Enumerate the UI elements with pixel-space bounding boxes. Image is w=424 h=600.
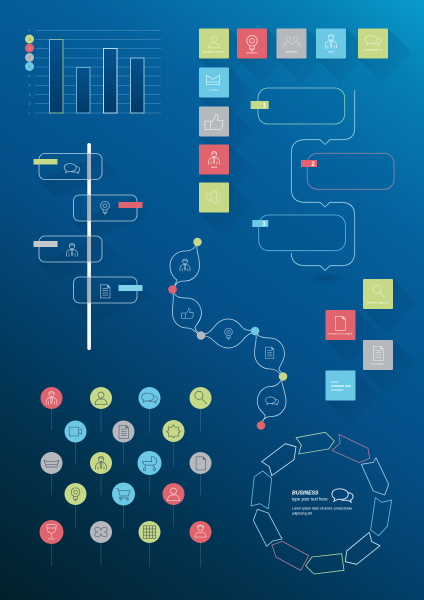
tile: text document (363, 340, 393, 370)
arrow: top right red (332, 434, 370, 463)
timeline item 1 (34, 154, 102, 180)
arrow: top green (296, 432, 334, 454)
pin: basket (40, 452, 62, 474)
wheel centre chat icon (332, 489, 353, 502)
pin: blank document (190, 452, 212, 474)
icon tile: chat: COMMUNICATION (364, 48, 383, 52)
pin: pram (138, 451, 162, 475)
timeline axis (87, 143, 91, 350)
wheel centre text: type your text here (292, 496, 328, 502)
pin: cart (112, 482, 135, 506)
wheel centre text: BUSINESS (292, 490, 319, 496)
pin: bulb (64, 483, 86, 505)
timeline item 2 (74, 195, 142, 221)
tile: search (363, 279, 393, 309)
axis labels: 3 (28, 92, 31, 97)
axis labels: 5 (28, 74, 31, 78)
legend dots: 8 (28, 46, 31, 50)
icon tile: team: PARTNERS (286, 50, 298, 54)
icon tile: user: BUSINESS CONCEPT (203, 52, 226, 54)
axis labels: 2 (28, 101, 31, 106)
snake curves (170, 245, 286, 422)
axis labels: 4 (28, 82, 31, 88)
legend dots (25, 34, 34, 71)
tile: text block (326, 370, 356, 400)
wheel centre text (292, 490, 353, 516)
pins row 4 (64, 482, 184, 529)
pins row 2 (64, 420, 184, 466)
pin: chat (138, 387, 160, 409)
timeline (34, 143, 142, 350)
arrow: lower right white (345, 532, 380, 564)
icon tile: speaker person: NAME (211, 166, 218, 169)
arrow: left blue (251, 471, 272, 509)
bar chart (25, 28, 161, 116)
pins row 1 (40, 387, 212, 433)
pins row 3 (40, 451, 212, 495)
legend dots: 9 (28, 36, 31, 42)
pins row 5 (40, 520, 212, 567)
icon tile: idea: BUSINESS (246, 52, 258, 54)
wheel centre text: adipiscing elit (292, 512, 312, 516)
snake path diagram (168, 238, 287, 430)
arrow: lower left pale (253, 509, 282, 546)
tag 1: 1 (263, 104, 267, 110)
snake dots (168, 238, 287, 430)
tag 3: 3 (262, 222, 266, 228)
chart grid lines (35, 30, 161, 113)
timeline axis overlaps (87, 154, 91, 302)
snake icons (180, 259, 278, 405)
pin: document (112, 420, 134, 442)
arrow wheel (251, 432, 392, 574)
icon tile: speaker person (199, 144, 229, 174)
wheel centre text: Lorem ipsum dolor sit amet, consectetuer (292, 506, 353, 510)
pin: woman (190, 521, 212, 543)
legend dots: 7 (28, 55, 31, 60)
pin: grid (138, 521, 160, 543)
tile: text block: LOGO (331, 380, 338, 384)
callout box 2 (301, 153, 394, 189)
tile: document: BUSINESS DOCUMENT (328, 334, 353, 336)
icon tile: speaker (199, 182, 229, 212)
icon tile: user (199, 28, 229, 58)
arrow: bottom green (306, 554, 344, 574)
tag 2: 2 (311, 162, 315, 168)
icon tile: manager: NAME (328, 50, 335, 54)
arrow: right blue (371, 498, 392, 536)
callout box 1 (251, 88, 345, 124)
long shadows (39, 28, 417, 424)
tile: text block: BUSINESS ONE (331, 384, 351, 388)
arrow: right pale (361, 458, 389, 495)
callout box 3 (252, 215, 345, 251)
pin: user (162, 483, 184, 505)
pin: clover (90, 521, 112, 543)
arrow: top left white (262, 444, 296, 476)
tile: text block: CONCEPT (331, 388, 344, 392)
icon tile: manager (316, 28, 346, 58)
axis labels: 0 (28, 28, 31, 32)
icon tile: mail: CONTACT (209, 88, 220, 92)
pin: video (64, 420, 86, 442)
icon tile: idea (237, 28, 267, 58)
pin: man with tie (90, 452, 112, 474)
bars (50, 40, 144, 113)
icon tile: thumbs up (199, 106, 229, 136)
legend dots: 6 (28, 64, 31, 69)
callout connector line (291, 90, 355, 270)
axis labels (28, 28, 31, 116)
tile: search: BUSINESS ANALYSIS (367, 302, 390, 304)
tile: document (326, 310, 356, 340)
pin: star (162, 420, 184, 442)
tile: text document: DOCUMENT (372, 364, 385, 366)
axis labels: 1 (28, 110, 31, 116)
icon tile: mail (199, 68, 229, 98)
pin: worker (90, 387, 112, 409)
icon tile: chat (358, 28, 388, 58)
icon tile: team (276, 28, 306, 58)
arrow: bottom red (272, 541, 309, 570)
pin: man (40, 387, 62, 409)
pin: wine glass (40, 520, 64, 544)
timeline item 3 (34, 236, 102, 262)
pin: search (190, 387, 212, 409)
timeline item 4 (74, 277, 142, 303)
